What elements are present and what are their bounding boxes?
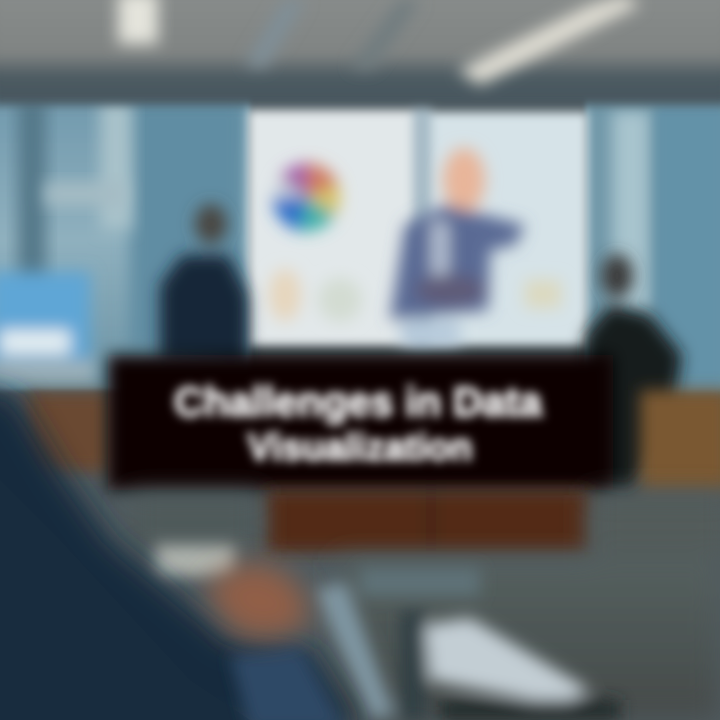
foreground papers on table (155, 545, 620, 720)
title text: Visualization (248, 427, 472, 469)
title text: Challenges in Data (174, 378, 543, 425)
wooden lower table (265, 490, 590, 552)
ceiling with lights (0, 0, 720, 105)
title text (174, 378, 543, 469)
floor (130, 495, 720, 720)
left monitor glow (0, 272, 95, 382)
wooden table side panels (25, 390, 720, 490)
foreground blurred person (0, 380, 360, 720)
presenter on screen (390, 148, 561, 348)
presentation screen (248, 108, 588, 348)
pie chart on screen (269, 163, 362, 322)
right standing person (580, 254, 682, 490)
dark podium (108, 355, 613, 490)
left standing person (160, 204, 248, 365)
